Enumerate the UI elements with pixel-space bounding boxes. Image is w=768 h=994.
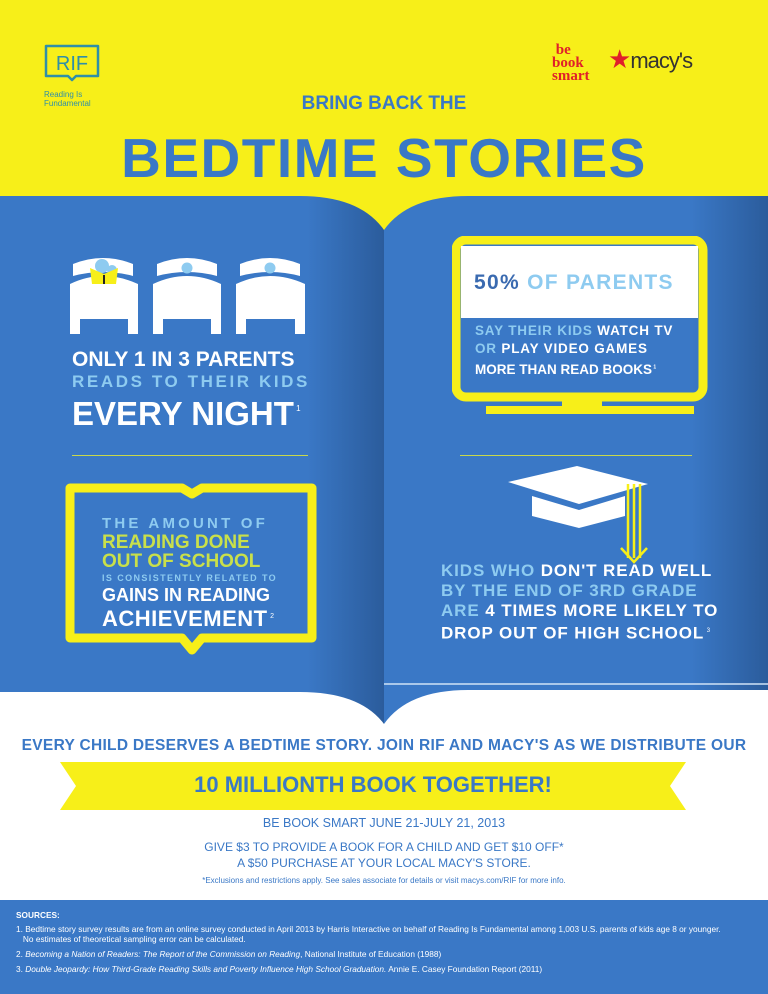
text: only 1 in 3 parents: READS TO THEIR KIDS [72,372,310,391]
text: give $3 offer: GIVE $3 TO PROVIDE A BOOK FOR A CHILD AND GET $10 OFF* [204,840,564,854]
text: kids who don't read well: ARE 4 TIMES MORE LIKELY TO [441,601,718,620]
logo: RIF: Fundamental [44,99,91,108]
panel: sources: SOURCES: [16,910,60,920]
text: watch tv: MORE THAN READ BOOKS 1 [475,362,656,376]
logo: be book smart: smart [552,68,590,84]
text: watch tv: OR PLAY VIDEO GAMES [475,341,648,356]
yellow header background [0,0,768,240]
logo: RIF [44,44,100,108]
panel: book outline with reading text [66,484,316,654]
text: kids who don't read well: DROP OUT OF HIGH SCHOOL 3 [441,624,711,643]
icon: beds [70,258,305,334]
text: exclusions: *Exclusions and restrictions apply. See sales associate for details or visit macys.com/RIF for more info. [202,876,566,885]
text: kids who don't read well: KIDS WHO DON'T READ WELL [441,561,712,580]
text: be book smart dates: BE BOOK SMART JUNE 21-JULY 21, 2013 [263,816,505,830]
text: kids who don't read well [441,561,718,643]
logo: be book smart: be [556,42,571,58]
logo: be book smart [552,42,590,84]
logo: macys: ★macy's [608,44,692,74]
panel: sources: 1. Bedtime story survey results are from an online survey conducted in April 2013 by Harris Interactive on behalf of Reading Is Fundamental among 1,003 U.S. parents of kids age 8 or younger. [16,924,721,934]
divider left [72,455,308,456]
logo: RIF: RIF [56,53,88,75]
text: reading done: GAINS IN READING [102,585,270,605]
ribbon banner [60,762,686,810]
divider right [460,455,692,456]
text: give $3 offer [204,840,564,870]
panel: sources [0,900,768,994]
ribbon banner: 10 MILLIONTH BOOK TOGETHER! [194,772,552,797]
panel: sources: 2. Becoming a Nation of Readers: The Report of the Commission on Reading, National Institute of Education (1988) [16,949,441,959]
logo: RIF: Reading Is [44,90,82,99]
text: only 1 in 3 parents: EVERY NIGHT 1 [72,395,301,432]
text: watch tv [475,323,673,376]
logo: be book smart: book [552,55,584,71]
text: 50% of parents: 50% OF PARENTS [474,271,674,294]
icon: graduation cap with arrow [508,466,648,564]
text: give $3 offer: A $50 PURCHASE AT YOUR LOCAL MACY'S STORE. [237,856,531,870]
text: reading done [102,515,277,631]
panel: sources: No estimates of theoretical sampling error can be calculated. [23,934,246,944]
text: reading done: THE AMOUNT OF [102,515,268,532]
subtitle: BRING BACK THE [302,93,466,114]
text: reading done: ACHIEVEMENT 2 [102,606,274,631]
text: only 1 in 3 parents [72,348,310,432]
title: BEDTIME STORIES [121,127,647,189]
text: kids who don't read well: BY THE END OF 3RD GRADE [441,581,698,600]
text: watch tv: SAY THEIR KIDS WATCH TV [475,323,673,338]
text: reading done: OUT OF SCHOOL [102,551,260,572]
text: reading done: IS CONSISTENTLY RELATED TO [102,573,277,583]
text: every child deserves: EVERY CHILD DESERVES A BEDTIME STORY. JOIN RIF AND MACY'S AS WE DISTRIBUTE OUR [22,737,746,754]
text: reading done: READING DONE [102,532,250,553]
icon: TV with stat [452,236,708,414]
panel: sources: 3. Double Jeopardy: How Third-Grade Reading Skills and Poverty Influence High School Graduation. Annie E. Casey Foundation Report (2011) [16,964,542,974]
text: only 1 in 3 parents: ONLY 1 IN 3 PARENTS [72,348,295,371]
